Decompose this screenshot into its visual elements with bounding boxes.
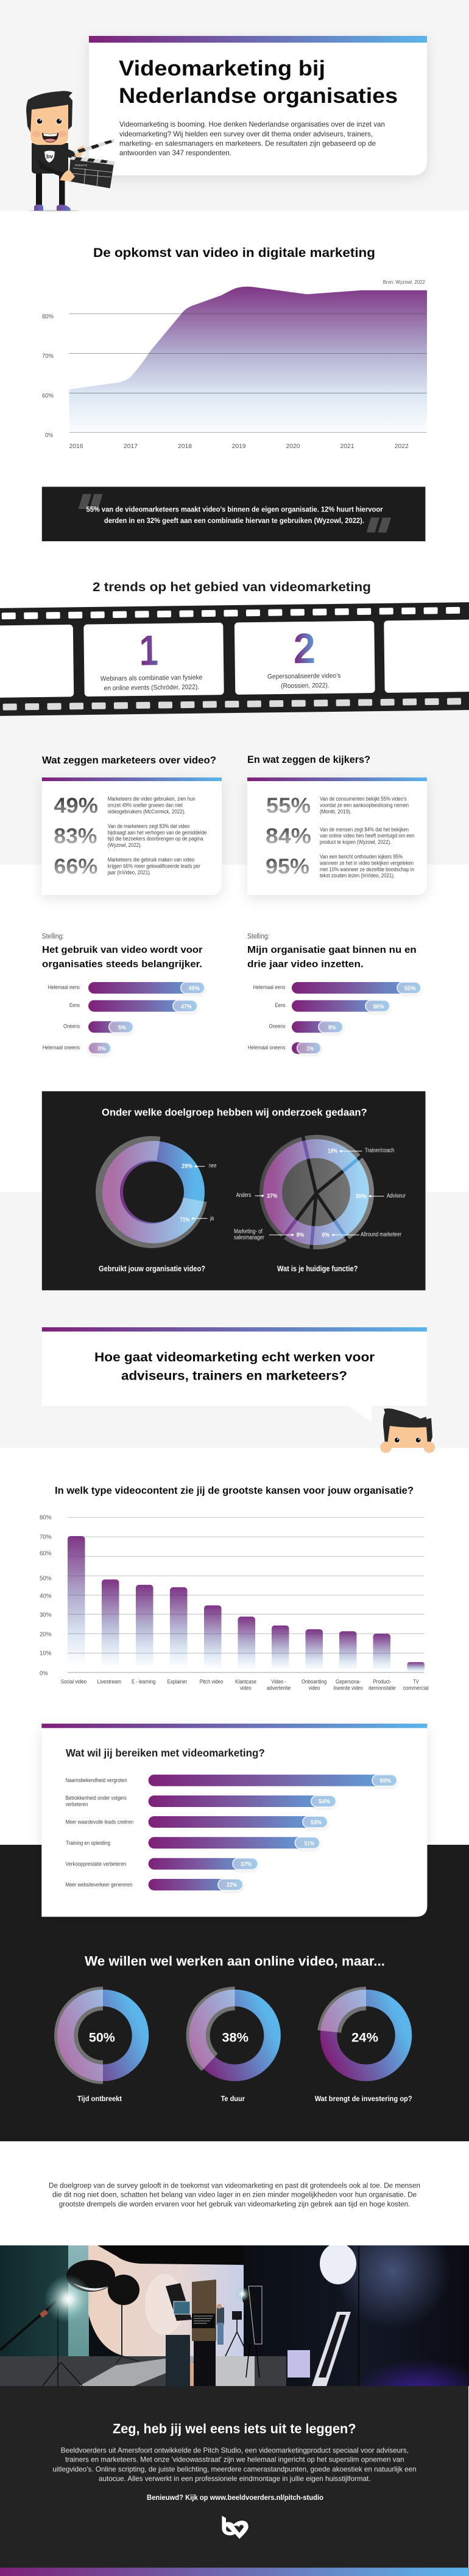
title: Videomarketing bij	[119, 57, 325, 80]
panel: barriers	[54, 1953, 412, 2103]
donut 50%: Tijd ontbreekt	[77, 2096, 122, 2103]
donut chart: job function	[234, 1135, 406, 1273]
donut chart: job function: Adviseur	[387, 1193, 406, 1199]
x axis labels	[69, 443, 409, 450]
stat 66%	[54, 855, 200, 879]
goal bars: 37%	[241, 1861, 252, 1868]
heading: Wat wil jij bereiken met videomarketing?	[66, 1747, 265, 1759]
x axis labels: 2021	[340, 443, 354, 450]
donut 24%	[315, 1987, 412, 2103]
donut 24%: 24%	[351, 2030, 378, 2044]
trend 2: 2	[293, 625, 316, 672]
panel: film strip	[0, 602, 469, 717]
stat 66%: jaar (InVideo, 2021).	[107, 869, 151, 876]
statement heading	[247, 945, 417, 969]
x axis labels: 2020	[286, 443, 300, 450]
stat 55%: (Montti, 2019).	[320, 809, 351, 815]
bar chart: Helemaal oneens	[43, 1044, 80, 1050]
panel: footer	[0, 2386, 468, 2568]
panel: speech bubble question	[42, 1327, 427, 1422]
panel: target group	[42, 1091, 426, 1290]
bar chart: Oneens	[269, 1023, 286, 1030]
goal bars: verbeteren	[66, 1802, 88, 1808]
y axis labels: 40%	[40, 1593, 51, 1600]
icon: peeking mascot	[0, 1408, 469, 1453]
x axis labels: video	[240, 1685, 252, 1691]
title	[119, 57, 398, 108]
y axis labels: 20%	[40, 1630, 51, 1638]
panel: statement 1	[42, 933, 205, 1054]
donut chart: job function: Wat is je huidige functie?	[277, 1265, 358, 1273]
stat 66%: 66%	[54, 855, 97, 879]
y axis labels: 60%	[40, 1549, 51, 1557]
body text	[52, 2446, 417, 2483]
donut 50%	[54, 1987, 140, 2103]
bar chart: 47%	[181, 1003, 192, 1010]
goal bars: 54%	[319, 1799, 330, 1805]
y axis labels: 70%	[42, 353, 54, 360]
donut chart: job function: salesmanager	[234, 1234, 264, 1241]
trend 2: Gepersonaliseerde video’s	[267, 672, 341, 681]
goal bars: Naamsbekendheid vergroten	[66, 1777, 127, 1784]
stat 95%	[266, 854, 414, 879]
bars	[68, 1536, 425, 1672]
y axis labels: 30%	[40, 1612, 51, 1619]
y axis labels	[40, 1514, 51, 1677]
title: Nederlandse organisaties	[119, 84, 398, 108]
bar chart: Eens	[275, 1002, 286, 1008]
trend 1: 1	[139, 626, 158, 674]
statement heading: organisaties steeds belangrijker.	[42, 959, 202, 969]
donut chart: uses video	[96, 1136, 217, 1273]
y axis labels: 50%	[40, 1574, 51, 1582]
callout: quote box: 55% van de videomarketeers maakt video’s binnen de eigen organisatie. 12% huurt hiervoor	[86, 507, 383, 514]
donut 38%: Te duur	[220, 2096, 245, 2103]
stat 84%: Van de mensen zegt 84% dat het bekijken	[320, 826, 409, 832]
y axis labels: 80%	[40, 1514, 51, 1521]
trend 1: en online events (Schröder, 2022).	[104, 684, 199, 692]
x axis labels: Video -	[272, 1679, 286, 1685]
heading: We willen wel werken aan online video, maar...	[85, 1953, 385, 1968]
stat 83%: Van de marketeers zegt 83% dat video	[108, 823, 189, 829]
goal bars: Betrokkenheid onder volgers	[66, 1795, 127, 1802]
bar chart: 0%	[98, 1045, 105, 1052]
bar chart: 5%	[118, 1025, 126, 1031]
intro text	[119, 120, 385, 157]
goal bars: Meer websiteverkeer genereren	[66, 1882, 133, 1889]
icon: mascot with clapperboard	[26, 91, 115, 212]
heading: marketers: Wat zeggen marketeers over video?	[42, 754, 216, 766]
y axis labels: 80%	[42, 313, 54, 320]
bar chart: 8%	[328, 1025, 336, 1031]
y axis labels: 10%	[40, 1650, 51, 1657]
stat 55%	[266, 794, 409, 818]
y axis labels: 70%	[40, 1533, 51, 1540]
x axis labels: Onboarding	[302, 1679, 326, 1685]
statement heading: drie jaar video inzetten.	[247, 959, 364, 969]
donut chart: job function: 30%	[356, 1193, 367, 1200]
stat 66%: krijgen 66% meer gekwalificeerde leads per	[108, 863, 200, 869]
x axis labels: Explainer	[168, 1679, 187, 1685]
stat 95%: Van een bericht onthouden kijkers 95%	[320, 854, 403, 860]
donut chart: uses video: ja	[210, 1215, 214, 1222]
x axis labels: video	[308, 1685, 320, 1691]
panel: viewers stats	[247, 777, 427, 895]
goal bars: 32%	[227, 1882, 237, 1889]
trend 2: (Roossien, 2022).	[281, 682, 330, 690]
x axis labels: Livestream	[97, 1679, 121, 1685]
x axis labels	[61, 1679, 429, 1691]
stat 95%: wanneer ze het in video bekijken vergeleken	[319, 860, 414, 866]
photo: video studio	[0, 2245, 469, 2386]
stat 55%: voordat ze een aankoopbeslissing nemen	[320, 802, 409, 809]
x axis labels: Social video	[61, 1679, 86, 1685]
donut chart: job function: Anders	[236, 1192, 251, 1199]
donut chart: job function: 6%	[322, 1232, 330, 1239]
panel: speech bubble question: adviseurs, trainers en marketeers?	[121, 1369, 347, 1383]
bar chart: 1%	[306, 1045, 314, 1052]
statement heading: Het gebruik van video wordt voor	[42, 945, 202, 955]
goal bars: 53%	[311, 1819, 322, 1827]
bar chart: Helemaal eens	[48, 984, 80, 990]
donut chart: uses video: 29%	[182, 1162, 193, 1170]
heading: De opkomst van video in digitale marketing	[93, 246, 375, 260]
heading: In welk type videocontent zie jij de grootste kansen voor jouw organisatie?	[55, 1485, 414, 1496]
x axis labels: E - learning	[132, 1679, 155, 1685]
trend 2	[234, 621, 375, 695]
stat 49%: videogebruikers (McCormick, 2022).	[108, 809, 185, 815]
conclusion text	[49, 2181, 420, 2208]
panel: goals card	[41, 1724, 427, 1917]
x axis labels: 2018	[178, 443, 192, 450]
stat 55%: 55%	[266, 794, 311, 818]
stat 83%: tijd die bezoekers doorbrengen op de pagina	[108, 836, 203, 842]
stat 49%: 49%	[54, 794, 98, 818]
panel: intro card	[89, 36, 427, 175]
heading: viewers: En wat zeggen de kijkers?	[247, 754, 370, 765]
goal bars: 69%	[380, 1778, 391, 1785]
goal bars: Meer waardevolle leads creëren	[66, 1819, 133, 1826]
stat 49%: omzet 49% sneller groeien dan niet	[108, 802, 183, 809]
intro text: videomarketing? Wij hielden een survey over dit thema onder adviseurs, trainers,	[119, 130, 373, 138]
x axis labels: Product-	[373, 1679, 392, 1685]
bar chart: 49%	[188, 986, 200, 992]
x axis labels: Klantcase	[235, 1679, 256, 1685]
section: rise of video chart	[42, 246, 427, 450]
donut chart: uses video: Gebruikt jouw organisatie video?	[99, 1265, 205, 1273]
y axis labels: 0%	[45, 432, 53, 439]
stat 95%: met 10% wanneer ze dezelfde boodschap in	[320, 866, 414, 872]
body text: Beeldvoerders uit Amersfoort ontwikkelde de Pitch Studio, een videomarketingproduct speciaal voor adviseurs,	[61, 2446, 409, 2454]
x axis labels: TV	[413, 1679, 419, 1685]
panel: statement 2	[247, 933, 421, 1054]
donut chart: job function: 8%	[297, 1232, 305, 1239]
stat 49%	[54, 794, 196, 818]
stat 83%: (Wyzowl, 2022).	[108, 842, 142, 848]
body text: trainers en marketeers. Met onze 'videowasstraat' zijn we helemaal ingericht op het superslim opnemen van	[65, 2455, 404, 2464]
statement heading: Mijn organisatie gaat binnen nu en	[247, 945, 417, 955]
body text: uitlegvideo's. Online scripting, de juiste belichting, meerdere camerastandpunten, goede akoestiek en natuurlijk een	[52, 2465, 417, 2473]
donut 38%: 38%	[222, 2030, 249, 2044]
conclusion text: grootste drempels die worden ervaren voor het gebruik van videomarketing zijn gebrek aan tijd en hoge kosten.	[59, 2200, 410, 2208]
kicker: Stelling:	[42, 933, 64, 941]
kicker: Stelling:	[247, 933, 269, 941]
stat 55%: Van de consumenten bekijkt 55% video’s	[320, 796, 407, 802]
icon: logo	[222, 2516, 249, 2539]
stat 84%: 84%	[266, 824, 311, 848]
bar chart: Helemaal eens	[253, 984, 286, 990]
donut chart: job function: 37%	[267, 1192, 278, 1199]
bar chart	[43, 982, 205, 1054]
stat 84%: product te kopen (Wyzowl, 2022).	[320, 839, 391, 845]
bar chart: Oneens	[63, 1023, 80, 1030]
x axis labels: 2022	[395, 443, 409, 450]
bar chart: 55%	[404, 986, 416, 992]
bar chart: Helemaal oneens	[248, 1044, 286, 1050]
stat 49%: Marketeers die video gebruiken, zien hun	[108, 796, 196, 802]
y axis labels: 0%	[40, 1670, 48, 1677]
stat 84%: van online video hen heeft overtuigd om een	[320, 833, 415, 839]
x axis labels: advertentie	[267, 1685, 291, 1691]
stat 66%: Marketeers die gebruik maken van video	[108, 857, 194, 863]
donut chart: job function: Marketing- of	[234, 1228, 263, 1235]
stat 95%: 95%	[266, 855, 309, 879]
x axis labels: liseerde video	[334, 1685, 363, 1691]
stat 83%: 83%	[54, 824, 97, 848]
icon: mascot with clapperboard: PRODUKTIE	[75, 164, 87, 167]
goal bars: 51%	[305, 1841, 314, 1847]
donut chart: job function: Allround marketeer	[361, 1232, 402, 1238]
x axis labels: Pitch video	[200, 1679, 223, 1685]
x axis labels: 2016	[69, 443, 83, 450]
stat 95%: tekst zouden lezen (InVideo, 2021).	[320, 872, 395, 879]
callout: quote box	[42, 487, 425, 541]
panel: marketers stats	[42, 777, 222, 895]
donut 24%: Wat brengt de investering op?	[315, 2096, 412, 2103]
stat 84%	[266, 824, 415, 848]
call to action: Benieuwd? Kijk op www.beeldvoerders.nl/pitch-studio	[147, 2494, 323, 2502]
bar chart: 36%	[373, 1003, 384, 1010]
stat 83%	[54, 823, 206, 848]
y axis labels: 60%	[42, 392, 54, 399]
x axis labels: demonstatie	[368, 1685, 396, 1691]
heading: Zeg, heb jij wel eens iets uit te leggen?	[113, 2421, 356, 2437]
heading: 2 trends: 2 trends op het gebied van videomarketing	[93, 580, 371, 594]
bar chart	[248, 982, 421, 1054]
trend 1	[83, 623, 224, 697]
goal bars	[66, 1775, 397, 1890]
stat 83%: bijdraagt aan het verhogen van de gemiddelde	[108, 829, 206, 835]
y axis labels	[42, 313, 54, 439]
trend 1: Webinars als combinatie van fysieke	[100, 674, 202, 683]
conclusion text: De doelgroep van de survey gelooft in de toekomst van videomarketing en past dit grotendeels ook al toe. De mensen	[49, 2181, 420, 2189]
panel: content types bar chart	[40, 1485, 429, 1691]
statement heading	[42, 945, 202, 969]
x axis labels: commercial	[403, 1685, 429, 1691]
gradient footer bar	[0, 2567, 469, 2576]
icon: mascot with clapperboard: bv	[46, 153, 53, 160]
intro text: marketing- en salesmanagers en marketeers. De resultaten zijn gebaseerd op de	[119, 139, 376, 147]
donut chart: job function: 19%	[328, 1147, 338, 1154]
heading: Onder welke doelgroep hebben wij onderzoek gedaan?	[102, 1106, 367, 1118]
donut 38%	[186, 1987, 272, 2103]
donut chart: uses video: 71%	[180, 1216, 189, 1224]
area chart	[42, 287, 427, 450]
intro text: antwoorden van 347 respondenten.	[119, 149, 231, 157]
x axis labels: 2019	[232, 443, 246, 450]
donut 50%: 50%	[89, 2030, 115, 2044]
body text: autocue. Alles verwerkt in een professionele eindmontage in jullie eigen huisstijlformat.	[99, 2474, 370, 2483]
donut chart: job function: Trainer/coach	[365, 1148, 394, 1154]
source note: Bron: Wyzowl, 2022	[383, 279, 425, 285]
conclusion text: die dit nog niet doen, schatten het belang van video lager in en zien minder mogelijkheden voor hun organisatie. De	[52, 2191, 417, 2199]
goal bars: Training en opleiding	[66, 1840, 110, 1847]
x axis labels: 2017	[124, 443, 138, 450]
x axis labels: Gepersona-	[336, 1679, 361, 1685]
donut chart: uses video: nee	[209, 1163, 217, 1170]
bar chart: Eens	[69, 1002, 80, 1008]
callout: quote box: derden in en 32% geeft aan een combinatie hiervan te gebruiken (Wyzowl, 2022).	[104, 518, 364, 525]
panel: speech bubble question: Hoe gaat videomarketing echt werken voor	[94, 1350, 375, 1364]
goal bars: Verkoopprestatie verbeteren	[66, 1861, 126, 1867]
intro text: Videomarketing is booming. Hoe denken Nederlandse organisaties over de inzet van	[119, 120, 385, 128]
